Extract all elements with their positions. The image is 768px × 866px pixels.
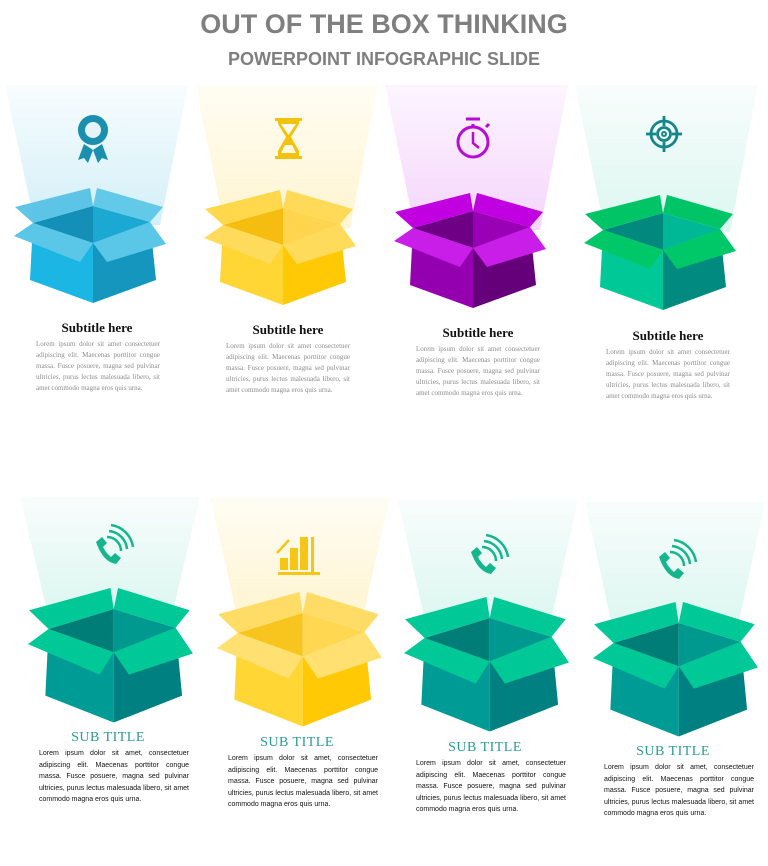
box: blue	[14, 188, 166, 303]
beam: purple	[385, 85, 568, 230]
icon: target	[646, 116, 682, 152]
beam: teal 1	[20, 497, 200, 615]
beam: green	[575, 85, 758, 232]
heading: bottom 3: SUB TITLE	[448, 740, 522, 755]
title: OUT OF THE BOX THINKING	[200, 9, 568, 39]
text: top 2: Lorem ipsum dolor sit amet consectetuer adipiscing elit. Maecenas porttitor congue massa. Fusce posuere, magna sed pulvinar ultricies, purus lectus malesuada libero, sit amet commodo magna eros quis urna.	[226, 342, 350, 394]
heading: top 3: Subtitle here	[443, 325, 513, 340]
heading: top 1: Subtitle here	[62, 320, 132, 335]
icon: stopwatch	[458, 119, 489, 157]
text: bottom 3: Lorem ipsum dolor sit amet, consectetuer adipiscing elit. Maecenas porttitor congue massa. Fusce posuere, magna sed pulvinar ultricies, purus lectus malesuada libero, sit amet commodo magna eros quis urna.	[416, 760, 566, 813]
text: top 3: Lorem ipsum dolor sit amet consectetuer adipiscing elit. Maecenas porttitor congue massa. Fusce posuere, magna sed pulvinar ultricies, purus lectus malesuada libero, sit amet commodo magna eros quis urna.	[416, 345, 540, 397]
icon: bar chart	[277, 537, 320, 575]
heading: bottom 2: SUB TITLE	[260, 735, 334, 750]
heading: top 4: Subtitle here	[633, 328, 703, 343]
heading: bottom 1: SUB TITLE	[71, 730, 145, 745]
beam: blue	[5, 85, 188, 225]
box: teal 3	[404, 597, 569, 732]
text: top 4: Lorem ipsum dolor sit amet consectetuer adipiscing elit. Maecenas porttitor congue massa. Fusce posuere, magna sed pulvinar ultricies, purus lectus malesuada libero, sit amet commodo magna eros quis urna.	[606, 348, 730, 400]
beam: yellow	[195, 85, 378, 228]
beam: teal 4	[585, 502, 765, 630]
icon: phone 3	[471, 535, 508, 574]
box: teal 1	[28, 588, 193, 723]
box: green	[584, 195, 736, 310]
icon: award ribbon	[78, 115, 108, 163]
heading: top 2: Subtitle here	[253, 322, 323, 337]
subtitle: POWERPOINT INFOGRAPHIC SLIDE	[228, 49, 540, 69]
beam: teal 3	[398, 500, 578, 625]
box: purple	[394, 193, 546, 308]
text: bottom 1: Lorem ipsum dolor sit amet, consectetuer adipiscing elit. Maecenas porttitor congue massa. Fusce posuere, magna sed pulvinar ultricies, purus lectus malesuada libero, sit amet commodo magna eros quis urna.	[39, 750, 189, 803]
text: top 1: Lorem ipsum dolor sit amet consectetuer adipiscing elit. Maecenas porttitor congue massa. Fusce posuere, magna sed pulvinar ultricies, purus lectus malesuada libero, sit amet commodo magna eros quis urna.	[36, 340, 160, 392]
box: yellow	[204, 190, 356, 305]
icon: phone 1	[96, 525, 133, 564]
text: bottom 4: Lorem ipsum dolor sit amet, consectetuer adipiscing elit. Maecenas porttitor congue massa. Fusce posuere, magna sed pulvinar ultricies, purus lectus malesuada libero, sit amet commodo magna eros quis urna.	[604, 764, 754, 817]
box: teal 4	[593, 602, 758, 737]
box: yellow 2	[217, 592, 382, 727]
icon: phone 4	[659, 540, 696, 579]
icon: hourglass	[275, 118, 302, 159]
heading: bottom 4: SUB TITLE	[636, 744, 710, 759]
beam: yellow 2	[210, 497, 390, 620]
text: bottom 2: Lorem ipsum dolor sit amet, consectetuer adipiscing elit. Maecenas porttitor congue massa. Fusce posuere, magna sed pulvinar ultricies, purus lectus malesuada libero, sit amet commodo magna eros quis urna.	[228, 755, 378, 808]
